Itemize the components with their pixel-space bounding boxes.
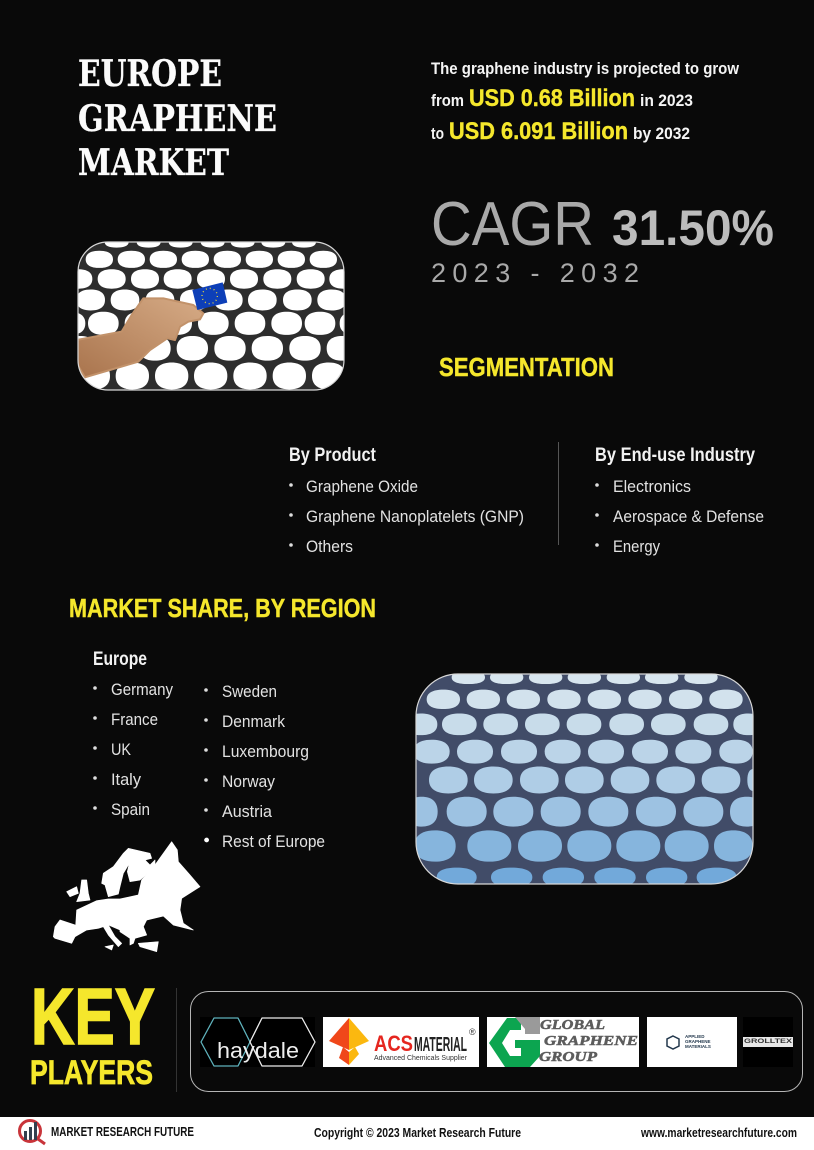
region list: Europe: France — [111, 710, 158, 729]
key players heading — [30, 972, 155, 1092]
logo: ACS Material: ® — [469, 1027, 476, 1037]
blue image border — [416, 674, 753, 884]
title: GRAPHENE — [78, 98, 277, 140]
segment list: by end-use industry: By End-use Industry — [595, 445, 755, 466]
logo: Applied Graphene Materials: MATERIALS — [685, 1044, 711, 1049]
logo: Grolltex — [743, 1017, 793, 1067]
segment list: by end-use industry: Energy — [613, 537, 660, 556]
region list: Europe: UK — [111, 740, 132, 759]
projection statement: from — [431, 91, 464, 110]
footer bar: Copyright © 2023 Market Research Future — [314, 1126, 521, 1140]
logo: Global Graphene Group: GROUP — [539, 1050, 598, 1065]
region list: Europe — [93, 649, 325, 851]
logo: Global Graphene Group: GLOBAL — [540, 1018, 605, 1033]
CAGR figure: 31.50% — [612, 200, 774, 256]
region list: Europe: Denmark — [222, 712, 285, 731]
logo: Applied Graphene Materials: GRAPHENE — [685, 1039, 711, 1044]
region list: Europe: Norway — [222, 772, 275, 791]
image: blue graphene lattice — [404, 671, 763, 887]
key players heading: PLAYERS — [30, 1054, 153, 1092]
icon: market research future magnifier — [20, 1120, 45, 1144]
segment list: by product — [289, 445, 524, 556]
region list: Europe: Germany — [111, 680, 173, 699]
key players heading: KEY — [31, 972, 155, 1061]
logo: ACS Material — [323, 1017, 479, 1067]
CAGR figure — [431, 190, 774, 288]
region list: Europe: Italy — [111, 770, 141, 789]
logo: ACS Material: MATERIAL — [414, 1034, 467, 1056]
logo: ACS Material: Advanced Chemicals Supplier — [374, 1055, 468, 1062]
logo: Global Graphene Group: GRAPHENE — [544, 1034, 638, 1049]
footer bar: MARKET RESEARCH FUTURE — [51, 1125, 194, 1139]
region list: Europe: Luxembourg — [222, 742, 309, 761]
logo: Grolltex: GROLLTEX — [744, 1039, 792, 1045]
segment list: by product: Graphene Nanoplatelets (GNP) — [306, 507, 524, 526]
logo: haydale — [200, 1017, 315, 1067]
segment list: by end-use industry: Aerospace & Defense — [613, 507, 764, 526]
market share heading: MARKET SHARE, BY REGION — [69, 593, 376, 623]
projection statement — [431, 59, 740, 145]
projection statement: by 2032 — [633, 124, 690, 143]
segment list: by end-use industry: Electronics — [613, 477, 691, 496]
projection statement: USD 0.68 Billion — [469, 85, 635, 112]
CAGR figure: 2023 - 2032 — [431, 258, 639, 288]
logo: Applied Graphene Materials — [647, 1017, 737, 1067]
region list: Europe: Spain — [111, 800, 150, 819]
projection statement: The graphene industry is projected to grow — [431, 59, 740, 78]
image border — [78, 242, 344, 390]
segment list: by product: Graphene Oxide — [306, 477, 418, 496]
segmentation heading: SEGMENTATION — [439, 352, 614, 382]
segment list: by end-use industry — [595, 445, 764, 556]
CAGR figure: CAGR — [431, 190, 594, 259]
logo: Applied Graphene Materials: APPLIED — [685, 1034, 705, 1039]
segment list: by product: Others — [306, 537, 353, 556]
logo: Global Graphene Group — [487, 1017, 639, 1067]
image: graphene lattice with hand holding EU flag — [78, 242, 344, 390]
projection statement: to — [431, 124, 444, 143]
projection statement: in 2023 — [640, 91, 693, 110]
segment list: by product: By Product — [289, 445, 377, 466]
region list: Europe: Austria — [222, 802, 273, 821]
region list: Europe: Europe — [93, 649, 147, 670]
logo: haydale: haydale — [217, 1038, 299, 1063]
map of Europe — [53, 838, 209, 952]
projection statement: USD 6.091 Billion — [449, 118, 628, 145]
key players panel — [190, 992, 802, 1092]
region list: Europe: Sweden — [222, 682, 277, 701]
footer bar — [0, 1117, 814, 1150]
logo: ACS Material: ACS — [374, 1031, 413, 1056]
title: MARKET — [78, 142, 229, 184]
title — [78, 53, 277, 184]
title: EUROPE — [78, 53, 222, 95]
region list: Europe: Rest of Europe — [222, 832, 325, 851]
